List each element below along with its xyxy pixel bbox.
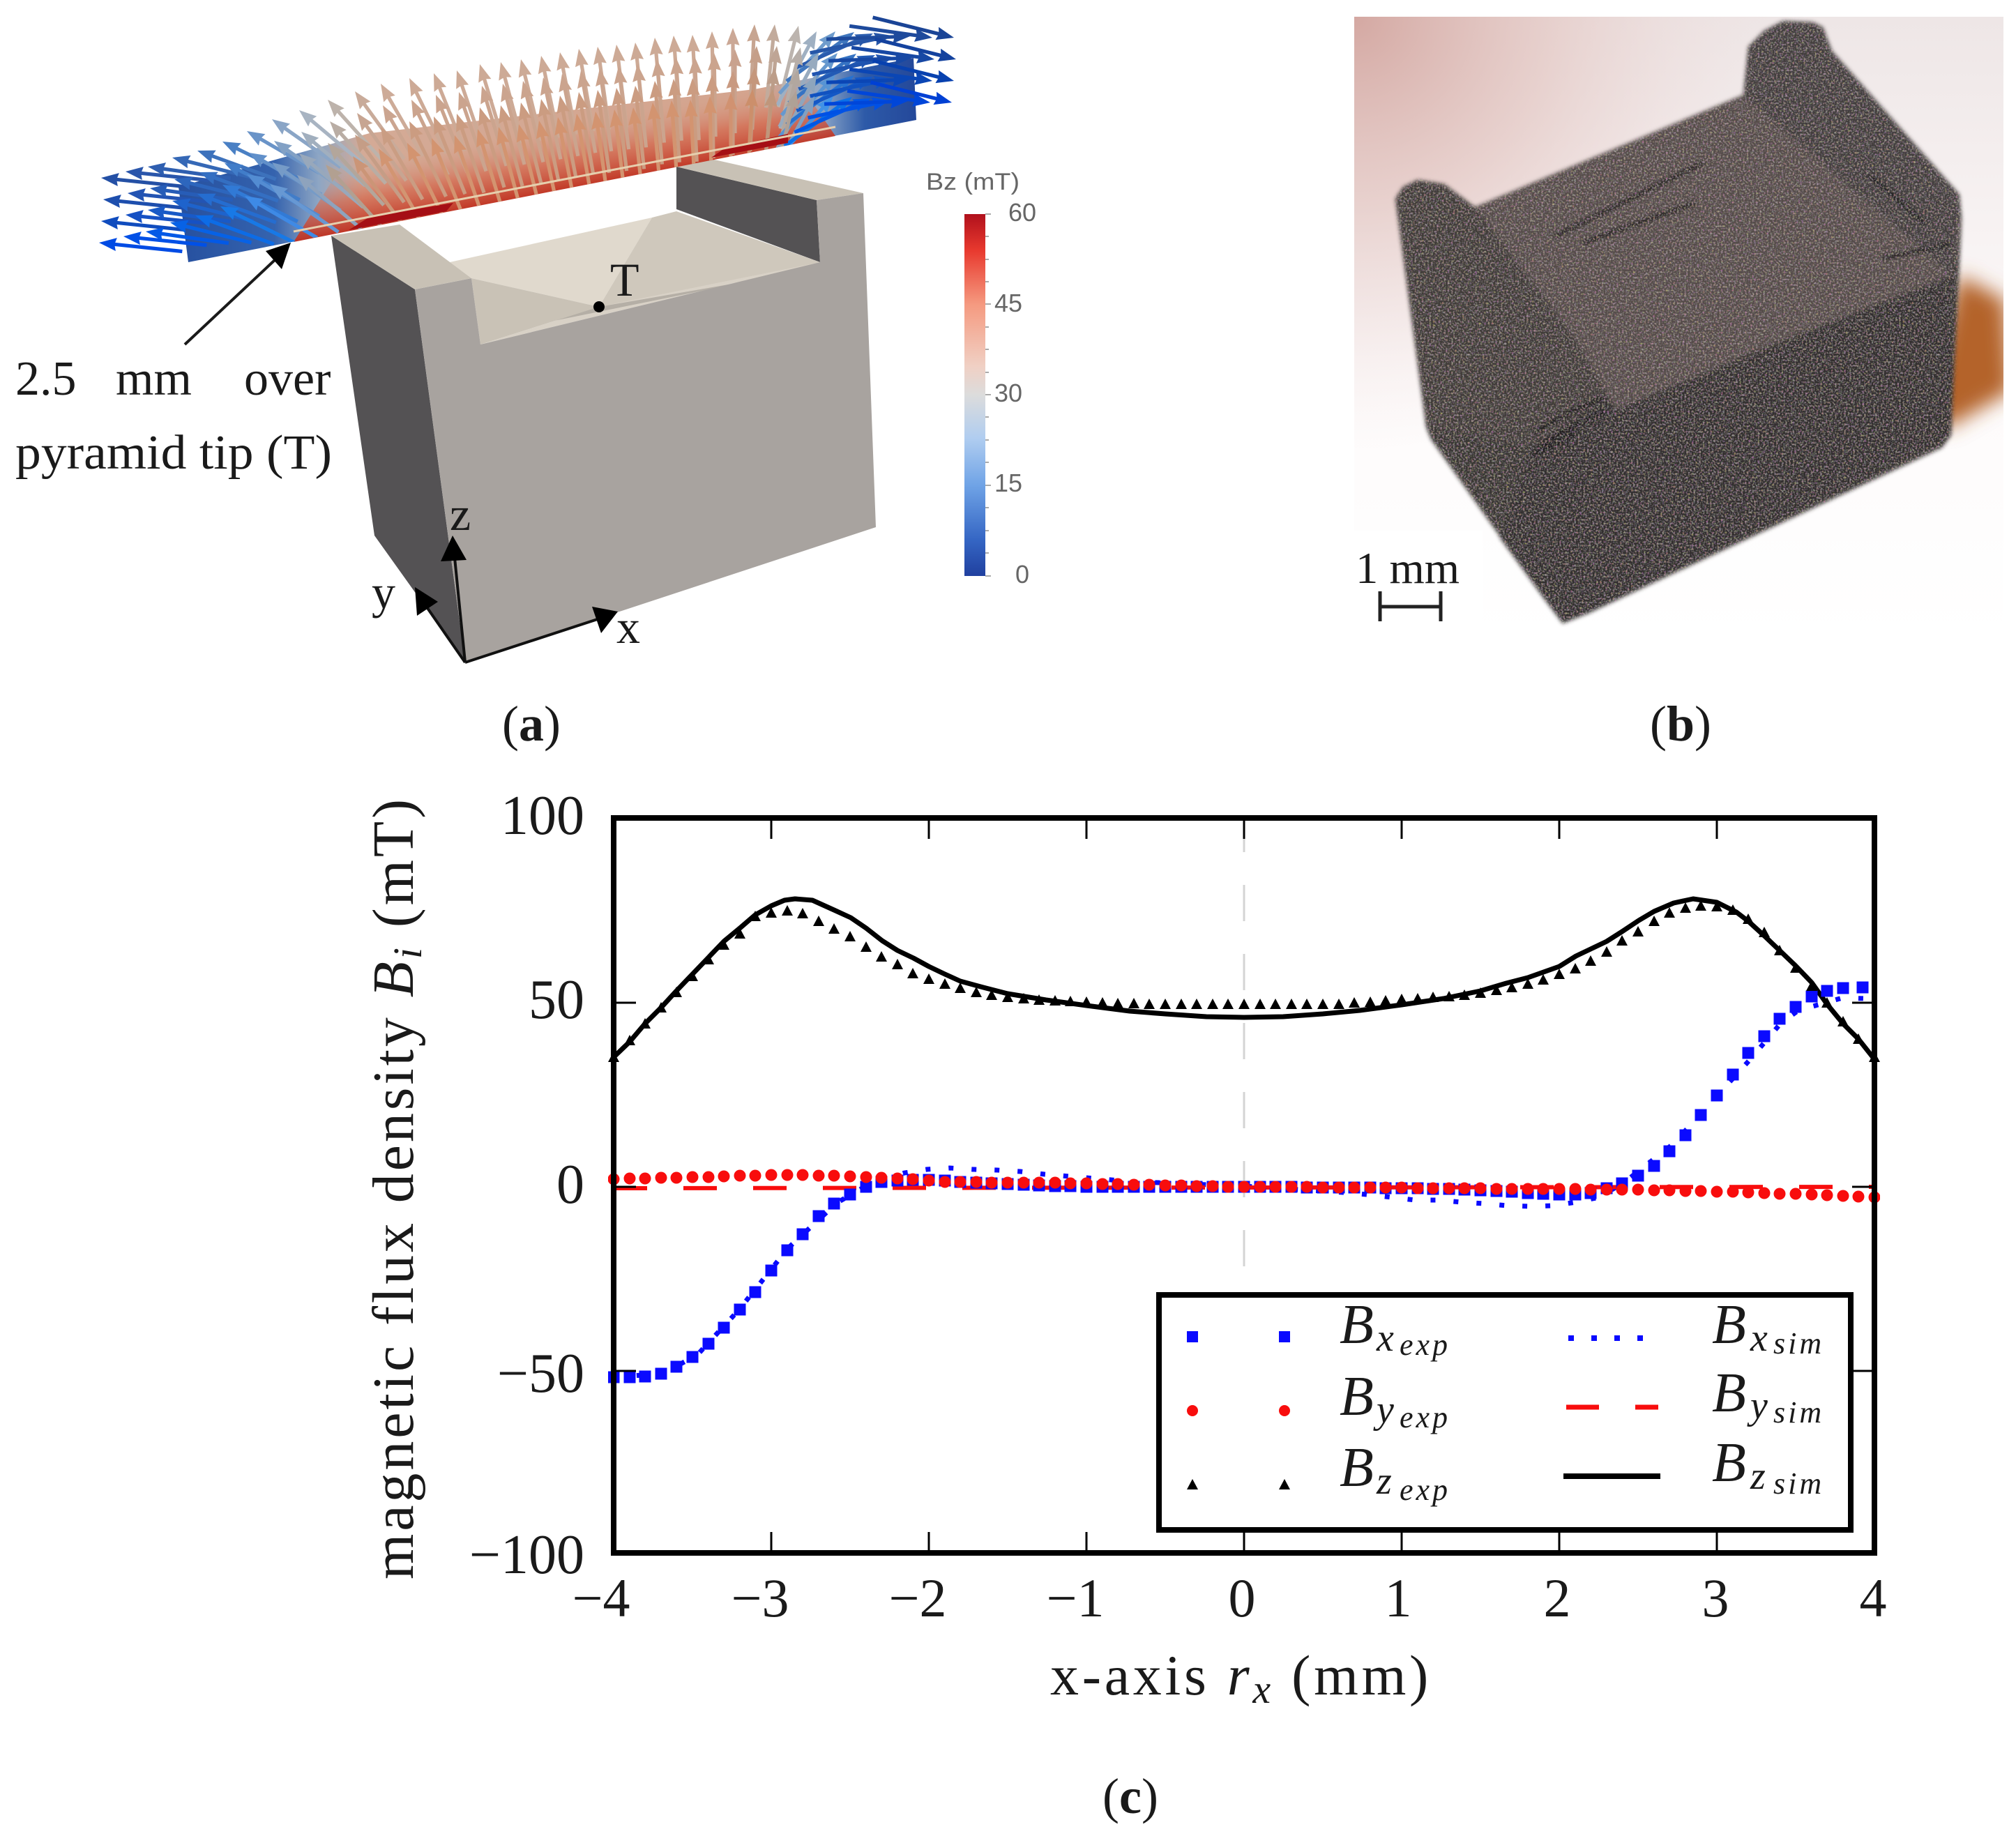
x axis tick labels: 2 [1544, 1568, 1570, 1628]
coordinate axes [372, 487, 640, 662]
legend entry: By sim: y [1747, 1384, 1768, 1427]
colour bar: Bz (mT): 30 [994, 379, 1022, 407]
x axis tick labels: 3 [1702, 1568, 1729, 1628]
series: By sim [614, 1187, 1874, 1188]
scale bar: 1 mm [1356, 543, 1460, 593]
label: distance over pyramid tip: 2.5 [15, 352, 77, 406]
panel a: magnet simulation [15, 11, 1036, 662]
coordinate axes: y [372, 566, 395, 619]
colour bar: Bz (mT): 45 [994, 289, 1022, 317]
series: Bz exp [614, 906, 1874, 1057]
y axis title: (mT) [361, 796, 426, 945]
legend entry: By sim: sim [1773, 1395, 1824, 1429]
legend entry: By sim: B [1712, 1363, 1746, 1424]
label: distance over pyramid tip: pyramid tip (T) [15, 426, 332, 480]
legend entry: Bx sim [1568, 1294, 1824, 1360]
y axis tick labels: −100 [469, 1524, 584, 1586]
shadow behind object [1948, 264, 2003, 441]
legend entry: Bx sim: x [1750, 1317, 1768, 1360]
x axis tick labels [572, 1568, 1887, 1628]
label: distance over pyramid tip [15, 352, 332, 480]
y axis tick labels: 0 [556, 1154, 584, 1215]
legend entry: Bz sim: sim [1773, 1466, 1824, 1501]
legend entry: Bz exp: exp [1400, 1473, 1450, 1507]
legend entry: By exp: exp [1400, 1400, 1450, 1434]
legend entry: By exp [1187, 1366, 1450, 1434]
legend entry: Bz sim: z [1750, 1455, 1766, 1498]
y axis tick labels: 100 [501, 785, 584, 847]
x axis title: x [1252, 1667, 1274, 1712]
pyramid tip marker T: T [610, 253, 639, 306]
series: By exp [614, 1175, 1874, 1197]
legend entry: Bx exp: exp [1400, 1328, 1450, 1362]
centre dashed guide [1243, 823, 1245, 1271]
x axis title: x-axis r [1050, 1644, 1252, 1707]
legend entry: Bz sim [1563, 1432, 1824, 1501]
x axis tick labels: 0 [1229, 1568, 1255, 1628]
x axis tick labels: −4 [572, 1568, 630, 1628]
legend entry: Bz exp [1187, 1437, 1450, 1507]
colour bar: Bz (mT) [926, 169, 1036, 589]
label: distance over pyramid tip: over [244, 352, 331, 406]
label: distance over pyramid tip: mm [116, 352, 192, 406]
y axis tick labels [469, 785, 584, 1586]
series: Bz sim [614, 899, 1874, 1059]
pyramid tip marker T [593, 253, 639, 312]
x axis tick labels: 1 [1385, 1568, 1411, 1628]
arrow: pointer to field plane [185, 243, 291, 344]
legend entry: Bz exp: z [1376, 1459, 1392, 1503]
coordinate axes: x [616, 600, 640, 653]
magnetic field arrows [98, 11, 957, 262]
legend entry: Bx exp: B [1340, 1294, 1374, 1356]
x axis title: (mm) [1274, 1644, 1432, 1707]
colour bar: Bz (mT): 0 [1015, 560, 1029, 589]
x axis tick labels: −2 [888, 1568, 947, 1628]
tick marks [614, 818, 1874, 1553]
caption (a): (a) [502, 696, 561, 752]
colour bar: Bz (mT): Bz (mT) [926, 169, 1020, 195]
x axis tick labels: −3 [731, 1568, 789, 1628]
x axis tick labels: 4 [1859, 1568, 1887, 1628]
y axis title: i [385, 945, 430, 959]
legend entry: Bx sim: B [1712, 1294, 1746, 1356]
legend [1159, 1294, 1851, 1530]
printed object [1395, 21, 1962, 623]
panel c: flux density chart [361, 785, 1887, 1712]
magnet body [331, 158, 876, 662]
series: Bx sim [614, 998, 1865, 1377]
y axis title: magnetic flux density B [361, 959, 426, 1579]
caption (c): (c) [1102, 1768, 1158, 1824]
data series [614, 899, 1874, 1377]
legend entry: Bz sim: B [1712, 1432, 1746, 1494]
legend entry: By sim [1566, 1363, 1824, 1429]
caption (b): (b) [1650, 696, 1711, 752]
legend entry: Bx sim: sim [1773, 1326, 1824, 1360]
panel b: photo of printed magnet [1354, 17, 2012, 637]
coordinate axes: z [450, 487, 471, 540]
legend entry: Bx exp [1187, 1294, 1450, 1362]
scale bar [1360, 554, 1459, 621]
y axis tick labels: −50 [497, 1343, 584, 1404]
x axis tick labels: −1 [1046, 1568, 1105, 1628]
y axis tick labels: 50 [529, 969, 584, 1031]
legend entry: Bx exp: x [1376, 1317, 1394, 1360]
colour bar: Bz (mT): 60 [1008, 198, 1036, 227]
series: Bx exp [614, 987, 1863, 1377]
legend entry: By exp: B [1340, 1366, 1374, 1427]
legend entry: By exp: y [1373, 1388, 1394, 1432]
colour bar: Bz (mT): 15 [994, 469, 1022, 497]
plot frame [614, 818, 1874, 1553]
legend entry: Bz exp: B [1340, 1437, 1374, 1499]
